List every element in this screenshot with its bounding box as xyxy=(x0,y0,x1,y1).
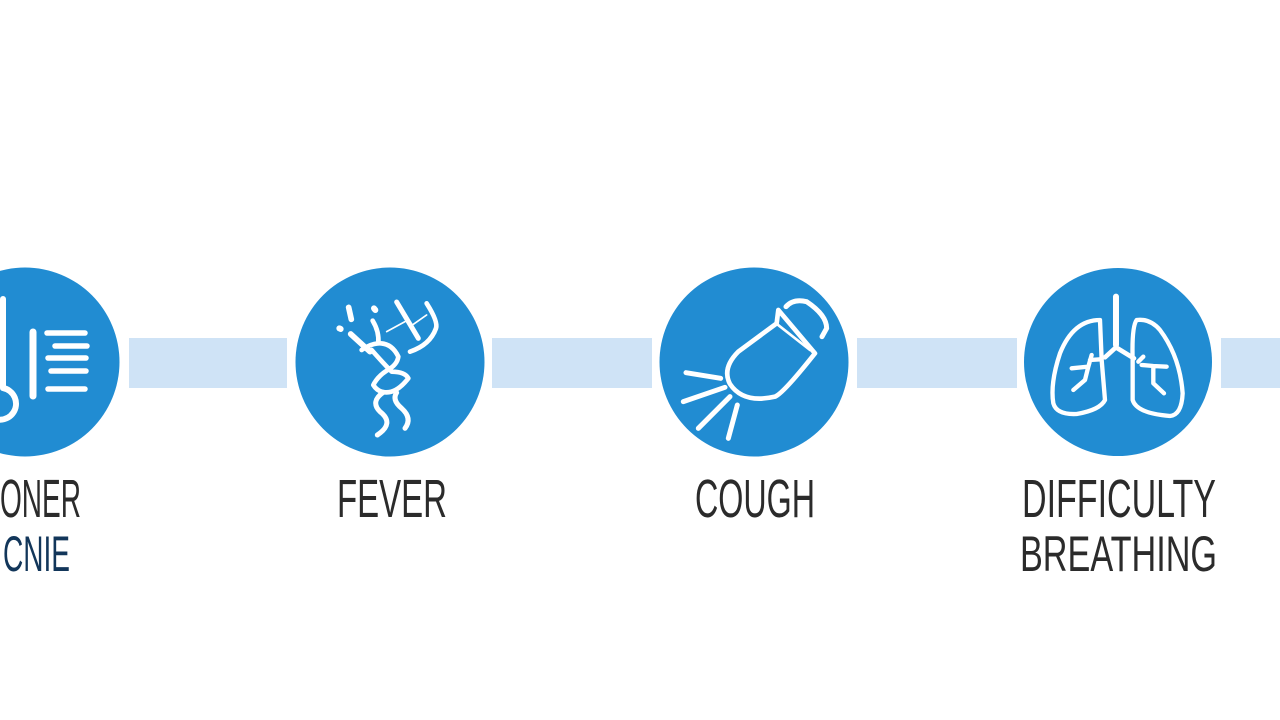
label: COUGH: COUGH xyxy=(695,469,815,529)
icon: branching fever badge xyxy=(296,268,484,456)
connector bar 1 xyxy=(129,338,287,388)
label: ONER CNIE xyxy=(0,469,81,582)
icon: cough badge xyxy=(660,268,848,456)
step: thermometer symptom xyxy=(0,268,120,582)
step: cough xyxy=(660,268,848,529)
step: difficulty breathing xyxy=(1020,268,1217,582)
label: ONER CNIE: ONER xyxy=(0,469,81,529)
label: ONER CNIE: CNIE xyxy=(3,526,70,582)
connector bar 3 xyxy=(857,338,1017,388)
icon: thermometer badge xyxy=(0,268,120,456)
label: DIFFICULTY BREATHING xyxy=(1020,469,1217,582)
step: fever xyxy=(296,268,484,529)
connector bar 2 xyxy=(492,338,652,388)
label: FEVER: FEVER xyxy=(337,469,447,529)
icon: lungs badge xyxy=(1024,268,1212,456)
connector bar 4 xyxy=(1221,338,1280,388)
